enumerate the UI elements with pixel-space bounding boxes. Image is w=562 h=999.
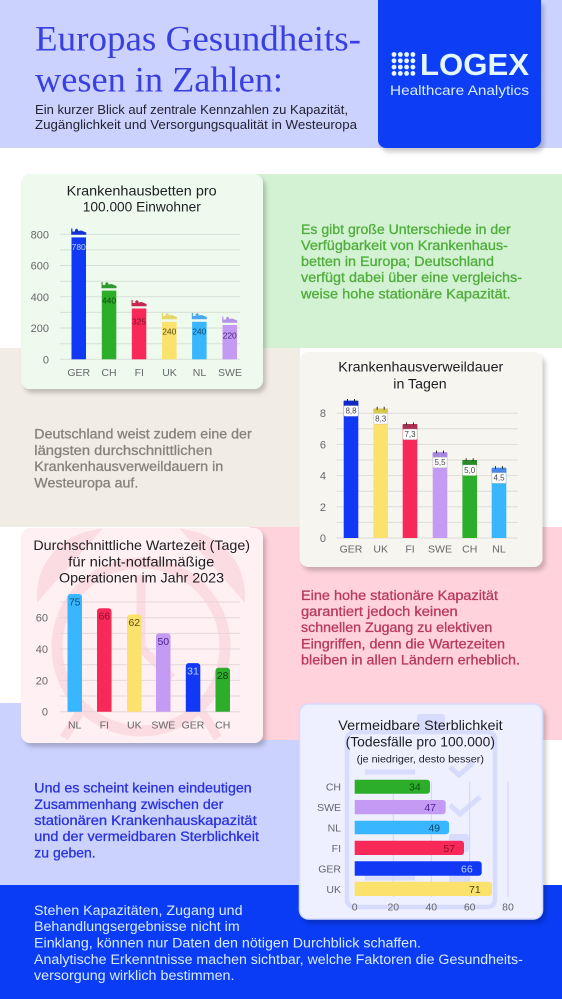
x axis: 0: [352, 902, 358, 914]
x axis: GER: [182, 720, 205, 732]
text: bed capacity: betten in Europa; Deutschland: [301, 254, 494, 269]
header subtitle: Ein kurzer Blick auf zentrale Kennzahlen zu Kapazität,: [35, 103, 348, 117]
text: waiting times: Eingriffen, denn die Wartezeiten: [301, 636, 505, 651]
x axis: CH: [462, 544, 477, 556]
bar values: 47: [424, 802, 436, 814]
icons: calendars with values: 5,5: [434, 458, 446, 467]
bar values: 66: [98, 610, 110, 622]
footer text: versorgung wirklich bestimmen.: [34, 968, 234, 983]
y axis: 4: [320, 471, 326, 483]
x axis: CH: [215, 720, 230, 732]
y axis: [36, 613, 48, 719]
y axis: 6: [320, 439, 326, 451]
chart title: 100.000 Einwohner: [83, 199, 201, 215]
icon: clipboard watermark: [347, 714, 495, 907]
header subtitle: Zugänglichkeit und Versorgungsqualität in Westeuropa: [35, 118, 357, 132]
y axis: 20: [36, 675, 48, 687]
chart title: [338, 717, 503, 766]
bar values: 780: [72, 242, 86, 252]
chart title: Krankenhausbetten pro: [67, 183, 217, 199]
y axis: 800: [31, 229, 49, 241]
chart title: (je niedriger, desto besser): [357, 754, 484, 766]
x axis: NL: [68, 720, 82, 732]
text: bed capacity: Es gibt große Unterschiede in der: [301, 222, 511, 237]
y axis country labels: UK: [326, 884, 341, 896]
header subtitle: [35, 103, 357, 132]
y axis: 0: [320, 533, 326, 545]
x axis: SWE: [151, 720, 175, 732]
x axis: FI: [405, 544, 415, 556]
y axis country labels: CH: [326, 782, 341, 794]
y axis country labels: GER: [318, 864, 341, 876]
card: [300, 704, 542, 919]
icons: calendars with values: 4,5: [493, 474, 505, 483]
panel: avoidable mortality chart: [300, 704, 542, 919]
bar values: [69, 596, 229, 682]
bar values: 49: [428, 822, 440, 834]
x axis: SWE: [218, 367, 242, 379]
footer text: [34, 903, 523, 983]
logo panel: [378, 0, 541, 148]
x axis: [67, 367, 242, 379]
bar values: 28: [217, 670, 229, 682]
panel: hospital beds chart: [21, 174, 263, 389]
text: length of stay: Westeuropa auf.: [34, 475, 138, 490]
bar values: 50: [157, 636, 169, 648]
bars: [68, 594, 230, 712]
x axis: [340, 544, 506, 556]
x axis: 20: [387, 902, 399, 914]
y axis: 8: [320, 408, 326, 420]
x axis: UK: [162, 367, 177, 379]
text: bed capacity: weise hohe stationäre Kapazität.: [300, 286, 511, 301]
chart title: [33, 537, 250, 586]
header title: Europas Gesundheits-: [35, 19, 361, 59]
bar values: 57: [443, 843, 455, 855]
y axis: 0: [42, 707, 48, 719]
icons: beds: [71, 228, 237, 323]
bar values: 220: [223, 331, 237, 341]
y axis: 200: [31, 323, 49, 335]
x axis: 40: [425, 902, 437, 914]
text: bed capacity: [300, 222, 522, 301]
x axis: [352, 902, 514, 914]
x axis: NL: [492, 544, 506, 556]
text: length of stay: Krankenhausverweildauern in: [34, 459, 223, 474]
text: length of stay: längsten durchschnittlichen: [34, 443, 212, 458]
chart title: in Tagen: [393, 375, 447, 391]
x axis: UK: [127, 720, 142, 732]
card: [21, 528, 263, 743]
x axis: 80: [502, 902, 514, 914]
footer text: Einklang, können nur Daten den nötigen Durchblick schaffen.: [34, 935, 421, 950]
text: waiting times: bleiben in allen Ländern erheblich.: [301, 652, 520, 667]
y axis: [320, 408, 326, 545]
text: no clear correlation: stationären Krankenhauskapazität: [34, 813, 257, 828]
footer text: Behandlungsergebnisse nicht im: [34, 919, 240, 934]
y axis country labels: FI: [332, 843, 341, 855]
chart title: Krankenhausverweildauer: [338, 359, 504, 375]
bar values: 66: [461, 864, 473, 876]
bar values: 240: [162, 326, 177, 336]
header title: [35, 19, 361, 100]
header title: wesen in Zahlen:: [35, 60, 283, 100]
bar values: 34: [409, 782, 421, 794]
chart title: Durchschnittliche Wartezeit (Tage): [33, 537, 250, 553]
bars: [355, 780, 492, 896]
logo wordmark: LOGEX: [420, 47, 529, 82]
text: no clear correlation: Und es scheint keinen eindeutigen: [34, 781, 252, 796]
chart title: für nicht-notfallmäßige: [68, 554, 215, 570]
y axis: 2: [320, 502, 326, 514]
card: [300, 352, 542, 567]
icons: calendars with values: 7,3: [404, 430, 416, 439]
panel: length of stay chart: [300, 352, 542, 567]
bar values: [409, 782, 481, 896]
x axis: SWE: [428, 544, 452, 556]
icons: calendars with values: 8,3: [375, 414, 387, 423]
logo tagline: Healthcare Analytics: [390, 82, 529, 98]
card: [21, 174, 263, 389]
icons: calendars with values: 8,8: [345, 406, 357, 416]
chart title: Vermeidbare Sterblichkeit: [338, 717, 503, 733]
chart title: Operationen im Jahr 2023: [59, 570, 224, 586]
y axis: 0: [43, 354, 49, 366]
footer text: Analytische Erkenntnisse machen sichtbar, welche Faktoren die Gesundheits-: [34, 952, 523, 967]
text: no clear correlation: und der vermeidbaren Sterblichkeit: [34, 829, 259, 844]
bar values: 31: [187, 666, 199, 678]
text: no clear correlation: Zusammenhang zwischen der: [34, 797, 224, 812]
x axis: UK: [373, 544, 388, 556]
bar values: 71: [469, 884, 481, 896]
y axis country labels: [317, 782, 341, 896]
icon: alarm clock watermark: [38, 530, 244, 738]
chart title: (Todesfälle pro 100.000): [346, 734, 495, 750]
chart title: [67, 183, 217, 215]
text: bed capacity: verfügt dabei über eine vergleichs-: [301, 270, 522, 285]
x axis: CH: [101, 367, 117, 379]
footer text: Stehen Kapazitäten, Zugang und: [34, 903, 242, 918]
bar values: 440: [102, 296, 116, 306]
chart title: [338, 359, 504, 391]
y axis: [31, 229, 49, 366]
icon: logo dots: [392, 52, 415, 76]
panel: waiting time chart: [21, 528, 263, 743]
icons: calendars with values: [344, 399, 506, 483]
bar values: 75: [69, 596, 81, 608]
x axis: [68, 720, 230, 732]
y axis: 600: [31, 260, 49, 272]
x axis: FI: [100, 720, 109, 732]
y axis: 400: [31, 292, 49, 304]
text: waiting times: garantiert jedoch keinen: [301, 604, 458, 619]
icons: calendars with values: 5,0: [464, 466, 476, 475]
text: length of stay: [34, 427, 252, 490]
y axis: 40: [36, 644, 48, 656]
text: no clear correlation: zu geben.: [34, 845, 96, 860]
y axis country labels: NL: [328, 822, 341, 834]
text: length of stay: Deutschland weist zudem eine der: [34, 427, 252, 442]
x axis: GER: [67, 367, 90, 379]
bar values: 62: [128, 617, 140, 629]
x axis: 60: [464, 902, 476, 914]
x axis: GER: [340, 544, 363, 556]
text: no clear correlation: [34, 781, 259, 860]
x axis: NL: [193, 367, 206, 379]
bars: [72, 237, 237, 359]
x axis: FI: [135, 367, 144, 379]
text: bed capacity: Verfügbarkeit von Krankenhaus-: [301, 238, 508, 253]
y axis: 60: [36, 613, 48, 625]
bar values: 325: [132, 316, 146, 326]
bar values: 240: [192, 326, 207, 336]
text: waiting times: [301, 588, 520, 667]
text: waiting times: schnellen Zugang zu elektiven: [301, 620, 492, 635]
bars: [344, 401, 506, 538]
bar values: [72, 242, 237, 341]
y axis country labels: SWE: [317, 802, 341, 814]
text: waiting times: Eine hohe stationäre Kapazität: [301, 588, 498, 603]
